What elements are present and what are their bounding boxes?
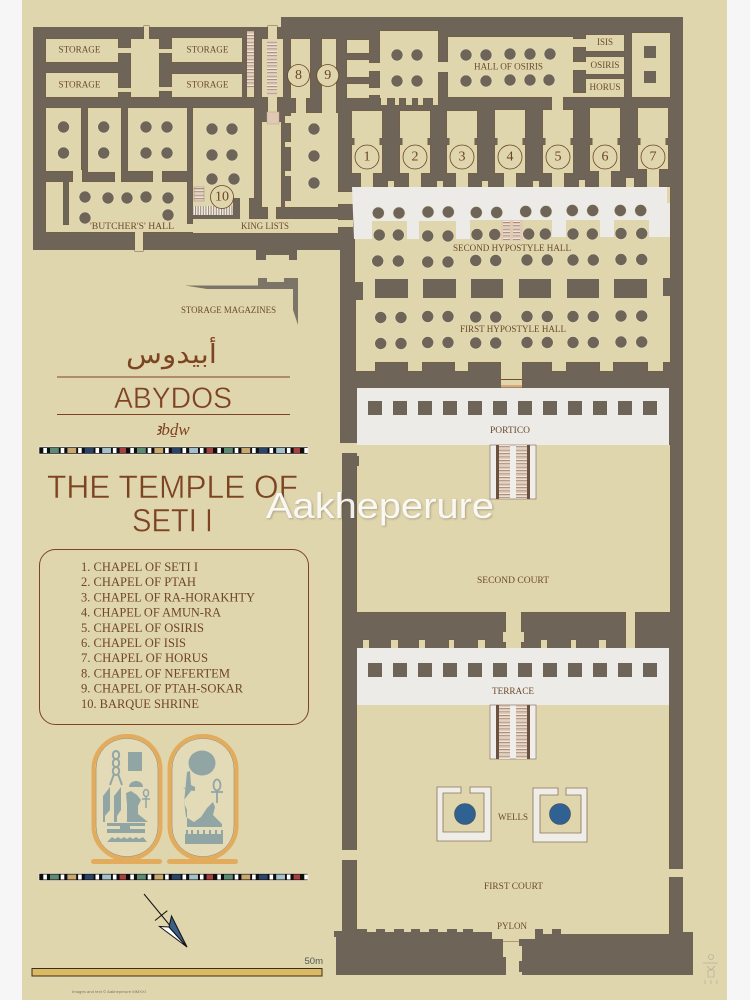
chapel number markers: 6 <box>602 150 608 164</box>
arabic name: أبيدوس <box>126 336 217 370</box>
chapel number markers <box>210 64 665 208</box>
plan labels: SECOND HYPOSTYLE HALL <box>453 244 571 254</box>
chapel list panel: 1. CHAPEL OF SETI I <box>81 559 198 574</box>
chapel list panel <box>40 550 308 724</box>
plan labels: STORAGE <box>186 46 229 56</box>
scale bar <box>32 956 323 976</box>
abydos heading: ABYDOS <box>114 382 232 415</box>
plan labels: ISIS <box>597 38 613 48</box>
plan labels: 'BUTCHER'S' HALL <box>90 222 174 232</box>
pylon <box>334 929 693 975</box>
transliteration: ꜣbḏw <box>155 420 190 439</box>
chapel number markers: 3 <box>458 150 466 164</box>
chapel number markers: 10 <box>215 190 229 204</box>
hypostyle doorway threshold <box>501 379 522 388</box>
chapel list panel: 5. CHAPEL OF OSIRIS <box>81 620 204 635</box>
decorative bar bottom <box>39 874 308 880</box>
chapel list panel: 3. CHAPEL OF RA-HORAKHTY <box>81 589 256 604</box>
name rules <box>57 377 290 414</box>
plan labels: STORAGE MAGAZINES <box>181 306 276 316</box>
title: SETI I <box>132 502 213 538</box>
plan labels: KING LISTS <box>241 222 289 232</box>
columns <box>58 48 648 350</box>
chapel number markers: 8 <box>295 68 302 83</box>
chapel list panel: 2. CHAPEL OF PTAH <box>81 574 196 589</box>
plan labels: OSIRIS <box>590 61 620 71</box>
plan labels: HORUS <box>590 83 620 93</box>
chapel list panel: 9. CHAPEL OF PTAH-SOKAR <box>81 681 243 696</box>
chapel list panel: 10. BARQUE SHRINE <box>81 696 199 711</box>
chapel list panel: 6. CHAPEL OF ISIS <box>81 635 186 650</box>
portico <box>357 388 669 445</box>
plan labels: STORAGE <box>58 80 101 90</box>
plan labels: SECOND COURT <box>477 576 549 586</box>
plan labels: FIRST HYPOSTYLE HALL <box>460 325 566 335</box>
artist mark hieroglyph <box>703 954 718 984</box>
cartouche right <box>167 736 238 864</box>
chapel number markers: 2 <box>412 150 418 164</box>
rectangular piers between the hypostyle halls <box>375 279 647 298</box>
plan labels: TERRACE <box>492 687 534 697</box>
plan labels <box>58 38 620 932</box>
plan labels: PYLON <box>497 922 527 932</box>
title <box>47 469 298 538</box>
chapel number markers: 4 <box>506 150 514 164</box>
square pillars in rear room <box>644 46 656 83</box>
scale bar: 50m <box>305 956 323 967</box>
north arrow <box>144 894 187 947</box>
terrace <box>357 648 669 705</box>
stairs between hypostyle floors <box>501 220 523 241</box>
chapel number markers: 7 <box>650 150 656 164</box>
temple wall mass <box>33 17 683 940</box>
room floors <box>46 26 684 941</box>
chapel list panel: 7. CHAPEL OF HORUS <box>81 650 208 665</box>
plan labels: WELLS <box>498 813 528 823</box>
credit: Images and text © Aakheperure MMXXI <box>72 989 146 994</box>
chapel list panel: 8. CHAPEL OF NEFERTEM <box>81 665 230 680</box>
terrace ramp and stairs <box>490 705 536 759</box>
portico ramp and stairs <box>490 445 536 499</box>
plan labels: FIRST COURT <box>484 882 543 892</box>
chapel number markers: 5 <box>554 150 562 164</box>
decorative bar top <box>39 447 308 454</box>
watermark: Aakheperure <box>266 485 494 526</box>
plan labels: HALL OF OSIRIS <box>474 62 543 72</box>
second hypostyle raised white floor <box>352 187 670 241</box>
cartouche left <box>91 736 162 864</box>
chapel number markers: 1 <box>364 150 370 164</box>
plan labels: PORTICO <box>490 426 530 436</box>
left wing stairs <box>193 31 279 219</box>
plan labels: STORAGE <box>58 46 101 56</box>
chapel number markers: 9 <box>324 68 331 83</box>
storage magazines wall fragments <box>185 249 298 325</box>
plan labels: STORAGE <box>186 80 229 90</box>
title: THE TEMPLE OF <box>47 469 298 505</box>
chapel list panel: 4. CHAPEL OF AMUN-RA <box>81 605 222 620</box>
wells <box>437 787 587 842</box>
